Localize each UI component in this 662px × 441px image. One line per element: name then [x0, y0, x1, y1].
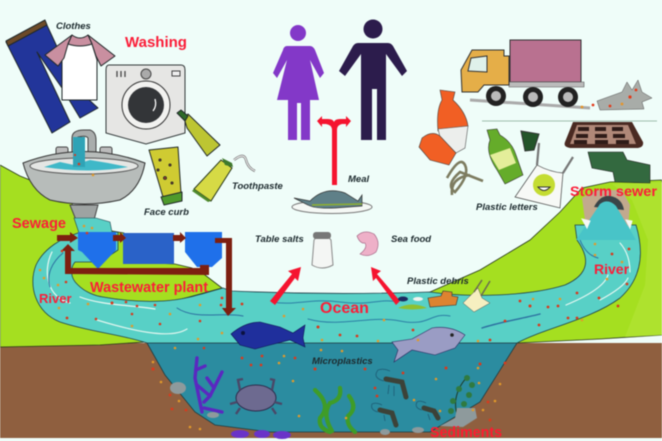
icon: plastic debris on surface — [398, 280, 490, 312]
left green hill — [0, 165, 222, 347]
microplastic particles: red — [61, 154, 630, 421]
icon: washing machine — [106, 65, 185, 144]
label: Ocean: Ocean — [320, 300, 369, 317]
label: Table salts: Table salts — [255, 234, 304, 245]
tank 1 — [78, 232, 116, 269]
label: Plastic letters: Plastic letters — [476, 202, 538, 213]
icon: plastic rope — [447, 162, 483, 195]
label: Microplastics: Microplastics — [312, 356, 373, 367]
icon: road debris — [581, 80, 652, 110]
icon: shrimp — [357, 232, 378, 256]
label: Meal: Meal — [348, 174, 369, 185]
arrow: ocean to seafood — [371, 267, 400, 305]
label: Sea food: Sea food — [391, 234, 431, 245]
icon: jeans — [6, 20, 98, 133]
label: River right: River — [594, 261, 630, 277]
right green hill — [430, 180, 662, 343]
icon: blue fish — [231, 322, 305, 349]
person: woman — [273, 25, 324, 140]
icon: plastic bag — [515, 143, 573, 208]
river wave lines — [47, 240, 630, 334]
icon: storm drain grate — [565, 122, 643, 148]
icon: green seaweed — [315, 388, 355, 432]
tank 2 — [123, 233, 174, 264]
icon: sink — [23, 130, 145, 220]
arrow: meal to people — [317, 116, 351, 185]
icon: aquatic plant — [448, 375, 475, 418]
pipe arrows — [57, 232, 236, 316]
icon: green underground pipe — [588, 152, 650, 183]
divider line — [482, 120, 657, 122]
person: man — [339, 20, 407, 140]
tank 3 — [185, 232, 222, 267]
icon: truck — [461, 40, 590, 108]
label: Plastic debris: Plastic debris — [407, 276, 469, 287]
seabed rocks and shells — [170, 382, 477, 439]
icon: salt shaker — [312, 232, 333, 268]
icon: grey fish — [392, 327, 465, 362]
icon: green tube — [177, 110, 220, 156]
microplastic particles: orange — [39, 174, 623, 430]
icon: green bottle — [487, 129, 523, 184]
deep water — [147, 343, 517, 432]
label: River left: River — [39, 291, 72, 306]
icon: plastic cup — [521, 131, 539, 151]
label: Sewage: Sewage — [12, 216, 66, 232]
icon: fish on plate — [292, 191, 372, 214]
surface water with rivers — [33, 225, 640, 343]
label: Sediments: Sediments — [430, 424, 502, 441]
icon: sink drain water — [74, 218, 118, 236]
label: Face curb: Face curb — [144, 207, 189, 218]
icon: face scrub tube — [149, 147, 182, 205]
label: Storm sewer: Storm sewer — [570, 183, 658, 199]
label: Washing: Washing — [125, 34, 187, 51]
icon: orange bottle — [419, 90, 468, 165]
icon: purple coral — [195, 358, 222, 412]
arrow: ocean to salt — [270, 267, 301, 305]
icon: toothpaste — [192, 156, 255, 202]
brown ground — [0, 343, 662, 438]
wastewater plant — [57, 232, 236, 316]
icon: small shrimps — [372, 369, 438, 425]
icon: crab — [230, 379, 282, 414]
icon: storm sewer outlet — [576, 190, 636, 240]
right hill light patch — [612, 182, 662, 337]
label: Toothpaste: Toothpaste — [232, 181, 284, 192]
icon: t-shirt — [45, 35, 115, 100]
label: Clothes: Clothes — [56, 21, 91, 32]
label: Wastewater plant: Wastewater plant — [90, 279, 208, 296]
